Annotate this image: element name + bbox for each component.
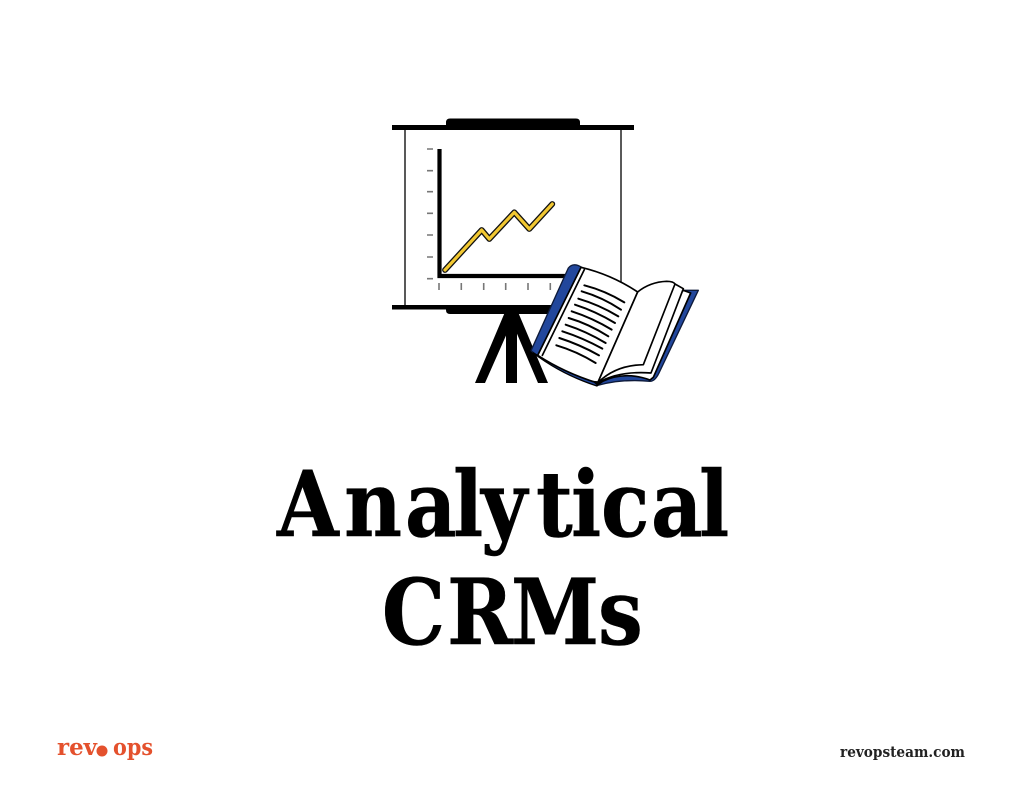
- logo: rev ops: rev: [57, 734, 98, 761]
- title: Analytical CRMs: [276, 452, 729, 666]
- title: Analytical CRMs: CRMs: [382, 560, 643, 666]
- line chart: [427, 149, 568, 290]
- title: Analytical CRMs: Analytical: [276, 452, 729, 558]
- logo: rev ops: [57, 734, 153, 761]
- projection screen on tripod: [392, 118, 634, 383]
- icon: presentation board with chart and book: [392, 118, 698, 386]
- logo: rev ops: ops: [113, 734, 153, 761]
- open book: [531, 265, 698, 386]
- website url: revopsteam.com: [840, 743, 965, 761]
